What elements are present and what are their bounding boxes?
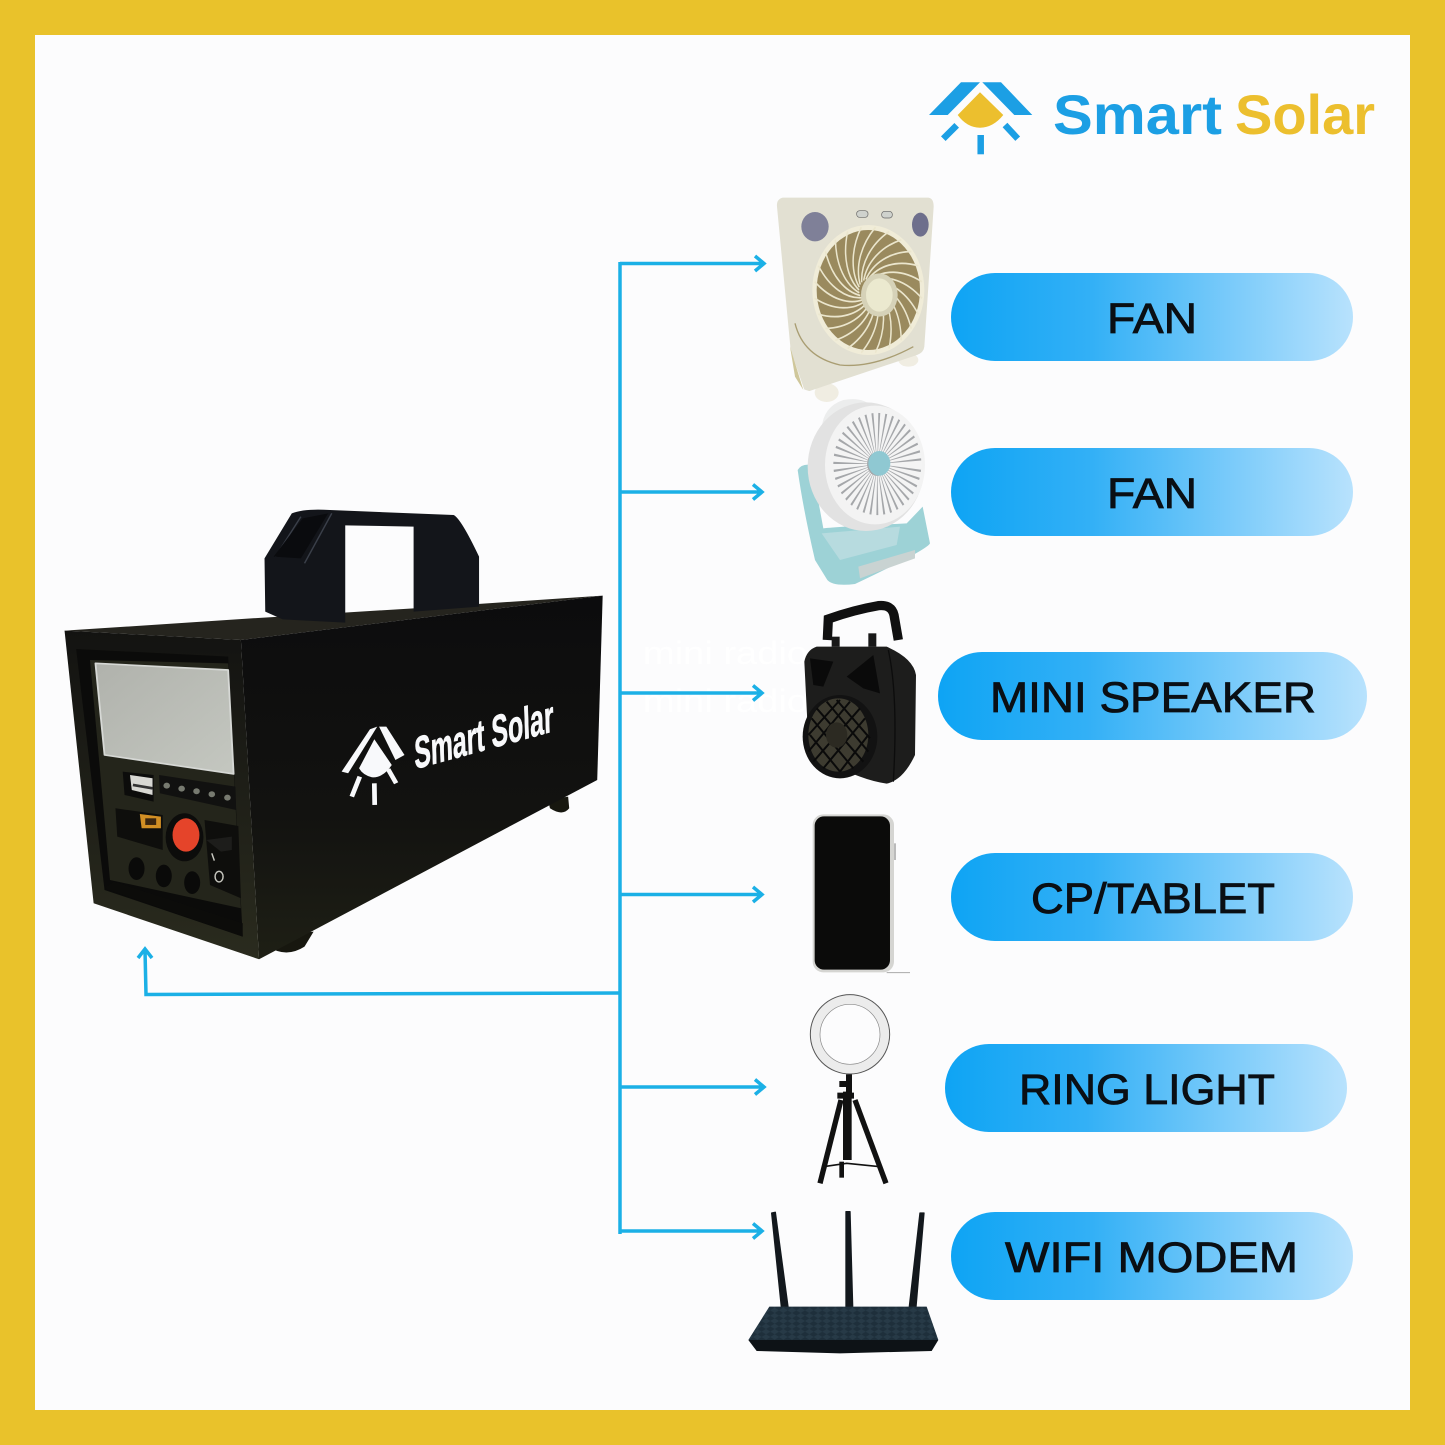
product: desk fan [798, 399, 930, 585]
antennas [772, 1212, 924, 1307]
rocker switch [205, 820, 241, 898]
feet [268, 797, 569, 952]
speaker body [804, 647, 916, 784]
faint ghost text: mini radio [643, 635, 808, 719]
handle [265, 510, 479, 623]
tweeter recesses [810, 658, 833, 687]
label: RING LIGHT: RING LIGHT [1019, 1066, 1275, 1114]
logo wordmark: Solar [1235, 83, 1375, 146]
box logo: Smart Solar [413, 691, 554, 780]
logo wordmark: Smart [1053, 83, 1222, 146]
logo wordmark [1053, 83, 1375, 146]
woofer grille [803, 695, 877, 778]
label: WIFI MODEM [951, 1212, 1353, 1300]
product: wifi router [748, 1212, 938, 1353]
return arrow to power station [138, 949, 620, 994]
connector socket [115, 808, 163, 850]
arrow to router [620, 1224, 762, 1238]
side face [241, 596, 603, 959]
label: WIFI MODEM: WIFI MODEM [1005, 1234, 1298, 1282]
spiral blades [814, 226, 923, 354]
label: MINI SPEAKER: MINI SPEAKER [990, 674, 1316, 722]
ring [815, 999, 885, 1069]
carrying handle [822, 399, 872, 428]
feet [815, 353, 918, 402]
product: Smart Solar power station [65, 510, 603, 959]
blue hub [868, 451, 890, 476]
fan hub [861, 273, 898, 317]
product: box fan [778, 199, 933, 402]
arrow to fan 1 [620, 256, 764, 271]
fan body [778, 199, 933, 390]
arrow to fan 2 [620, 484, 762, 500]
arrow to speaker [620, 686, 762, 700]
speaker grilles [801, 212, 829, 241]
teal stand [798, 465, 930, 585]
icon: house with lamp [929, 82, 1032, 154]
product: smartphone [813, 814, 910, 973]
label: CP/TABLET: CP/TABLET [1031, 875, 1275, 923]
arrow to ring light [620, 1080, 764, 1094]
USB port [123, 772, 154, 802]
box logo [342, 691, 554, 805]
router body [748, 1307, 938, 1340]
front recess [76, 649, 243, 937]
label: CP/TABLET [951, 853, 1353, 941]
label: RING LIGHT [945, 1044, 1347, 1132]
front face [65, 631, 259, 959]
controls [857, 211, 892, 218]
arrow to phone [620, 887, 762, 902]
connector arrows [138, 256, 764, 1238]
logo: Smart Solar [929, 82, 1375, 154]
label: MINI SPEAKER [938, 652, 1367, 740]
red button [166, 813, 203, 861]
DC outlets [129, 857, 200, 894]
radial fan blades [833, 413, 921, 515]
main vertical line [618, 262, 622, 1234]
label: FAN: FAN [1107, 470, 1197, 518]
fan grille [812, 225, 924, 355]
top face [65, 596, 603, 640]
label: FAN [951, 448, 1353, 536]
product: ring light on tripod [810, 995, 890, 1183]
fan housing [808, 402, 924, 531]
label: FAN: FAN [1107, 295, 1197, 343]
speaker handle [827, 606, 898, 640]
product: mini speaker [803, 606, 916, 784]
LED lamp lens [95, 663, 234, 774]
label: FAN [951, 273, 1353, 361]
battery LEDs [159, 775, 236, 810]
faint ghost text: mini radio: mini radio [643, 635, 808, 671]
faint ghost text: mini radio: mini radio [643, 683, 808, 719]
tripod [820, 1074, 886, 1183]
